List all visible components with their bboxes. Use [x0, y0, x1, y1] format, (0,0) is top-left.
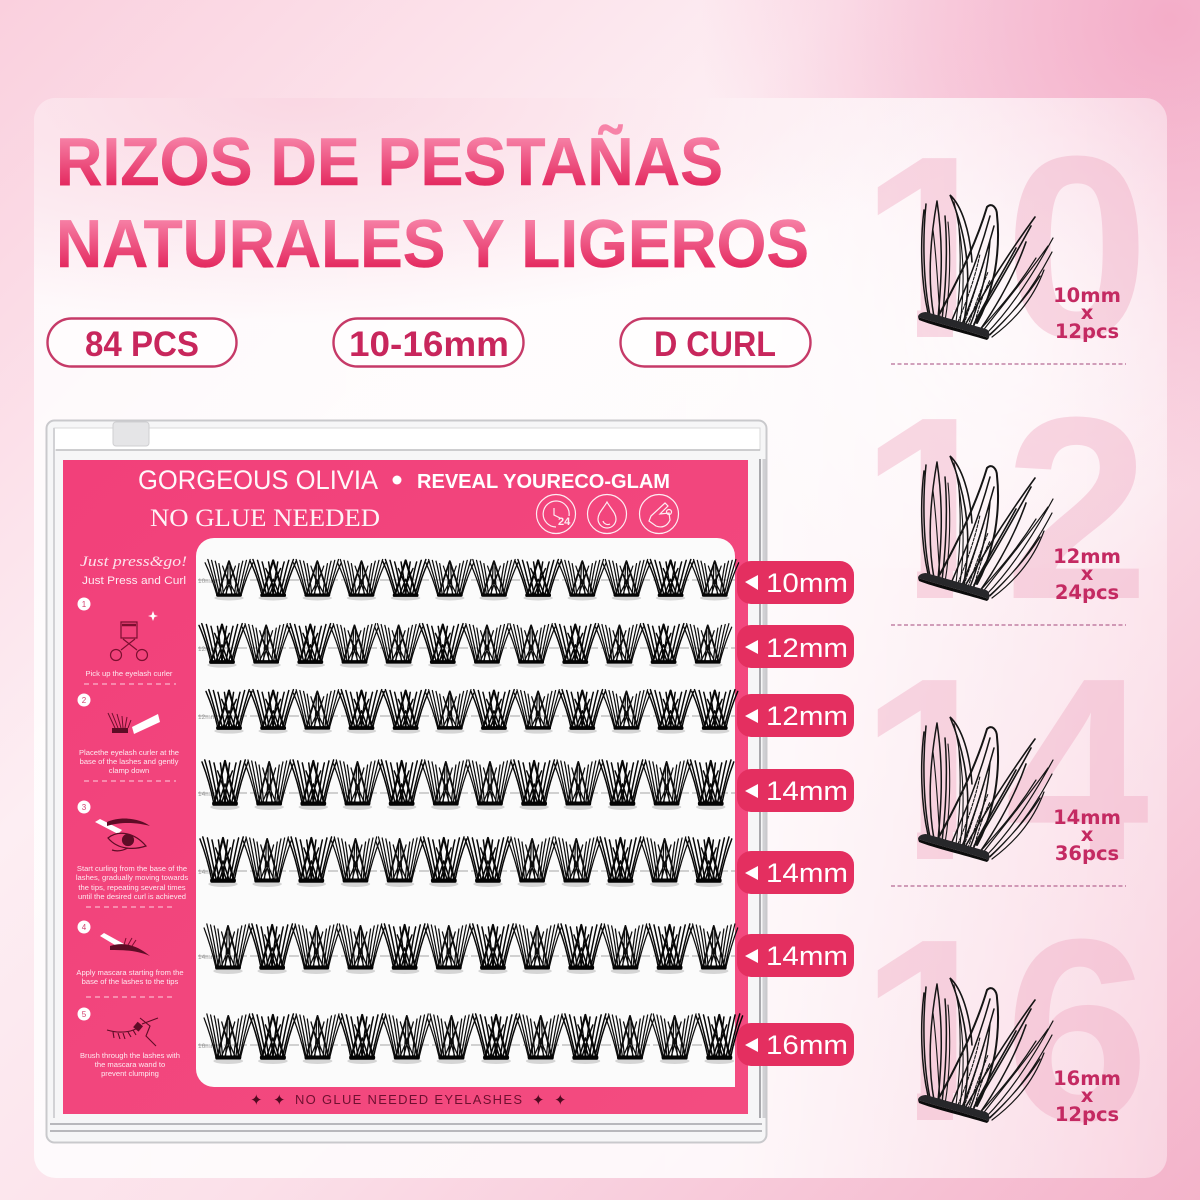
card header: brand: NO GLUE NEEDED — [150, 505, 380, 532]
step 5 — [78, 1008, 180, 1078]
pill: curl: D CURL — [654, 325, 776, 364]
row: 10mm lashes — [198, 559, 739, 600]
tag: 16mm — [737, 1023, 854, 1066]
title: RIZOS DE PESTAÑAS — [56, 124, 723, 200]
step 3: until the desired curl is achieved — [78, 892, 186, 901]
step 3: lashes, gradually moving towards — [76, 873, 188, 882]
card header: brand — [138, 465, 670, 532]
item: 12mm: 12 — [860, 364, 1149, 654]
item: 14mm: 36pcs — [1055, 842, 1119, 865]
tag: 14mm — [737, 934, 854, 977]
instructions column — [76, 554, 188, 1078]
row: 12mm lashes — [198, 624, 735, 668]
product: lash case — [46, 420, 766, 1142]
item: 10mm: x — [1081, 301, 1094, 324]
step 1: 1 — [82, 600, 87, 609]
item: 16mm: x — [1081, 1084, 1094, 1107]
item: 10mm: 10mm — [1053, 284, 1121, 307]
item: 12mm: 24pcs — [1055, 581, 1119, 604]
row: 10mm lashes: 10mm — [198, 578, 216, 585]
tag: 12mm: 12mm — [766, 701, 848, 731]
row: 16mm lashes — [198, 1014, 743, 1064]
item: 16mm — [878, 938, 1140, 1125]
card icons — [536, 494, 678, 534]
card footer text: ✦ — [250, 1092, 263, 1109]
row: 12mm lashes — [198, 690, 738, 734]
icon: 24 hours — [536, 494, 576, 534]
step 3 — [76, 800, 188, 901]
item: 10mm: 12pcs — [1055, 320, 1119, 343]
step 4: Apply mascara starting from the — [76, 968, 184, 977]
icon: pressing hand — [640, 494, 678, 534]
tag: 16mm: 16mm — [766, 1030, 848, 1060]
item: 12mm — [878, 416, 1139, 603]
step 5: prevent clumping — [101, 1069, 159, 1078]
step 5: Brush through the lashes with — [80, 1051, 180, 1060]
pill: count — [48, 318, 236, 366]
step 1 — [78, 598, 173, 678]
item: 12mm: 12mm — [1053, 545, 1121, 568]
tag: 10mm: 10mm — [766, 568, 848, 598]
step 2: base of the lashes and gently — [80, 757, 179, 766]
pill: curl — [620, 318, 810, 366]
step 4: base of the lashes to the tips — [82, 977, 179, 986]
item: 14mm: 14mm — [1053, 806, 1121, 829]
clear plastic case — [46, 420, 766, 1142]
card footer text — [250, 1092, 567, 1109]
pill: length: 10-16mm — [349, 325, 509, 364]
row: 14mm lashes: 14mm — [198, 791, 216, 798]
icon: 24 hours: 24 — [558, 516, 571, 528]
title: NATURALES Y LIGEROS — [56, 206, 809, 282]
card footer text: NO GLUE NEEDED EYELASHES — [295, 1092, 522, 1107]
row: 12mm lashes: 12mm — [198, 714, 216, 721]
step 3: Start curling from the base of the — [77, 864, 187, 873]
item: 16mm: 16 — [860, 886, 1149, 1176]
item: 12mm: x — [1081, 562, 1094, 585]
step 5: 5 — [82, 1010, 87, 1019]
row: 16mm lashes: 16mm — [198, 1043, 216, 1050]
heading: just press and go: Just Press and Curl — [82, 575, 186, 587]
tag: 12mm — [737, 625, 854, 668]
item: 10mm: 10 — [860, 103, 1149, 393]
step 3: 3 — [82, 803, 87, 812]
item: 14mm: 14 — [860, 625, 1151, 915]
tag: 14mm: 14mm — [766, 776, 848, 806]
heading: just press and go: Just press&go! — [80, 554, 187, 570]
pill: count: 84 PCS — [85, 325, 199, 364]
item: 16mm: 16mm — [1053, 1067, 1121, 1090]
row: 14mm lashes — [198, 760, 735, 810]
tag: 14mm: 14mm — [766, 858, 848, 888]
pill: length — [334, 318, 524, 366]
title — [56, 124, 809, 282]
tag: 12mm — [737, 694, 854, 737]
step 4: 4 — [82, 923, 87, 932]
card header: brand: GORGEOUS OLIVIA — [138, 465, 378, 495]
item: 14mm — [878, 680, 1148, 864]
step 5: the mascara wand to — [95, 1060, 165, 1069]
step 1: Pick up the eyelash curler — [86, 669, 173, 678]
length tags — [737, 561, 854, 1066]
spec pills — [48, 318, 810, 366]
card footer text: ✦ — [532, 1092, 545, 1109]
tag: 14mm — [737, 851, 854, 894]
item: 14mm: x — [1081, 823, 1094, 846]
step 2: 2 — [82, 696, 87, 705]
tag: 10mm — [737, 561, 854, 604]
step 2 — [78, 694, 179, 775]
step 3: the tips, repeating several times — [78, 883, 186, 892]
tag: 12mm: 12mm — [766, 633, 848, 663]
tag: 14mm: 14mm — [766, 941, 848, 971]
pink card — [63, 460, 748, 1114]
icon: water drop — [588, 494, 626, 534]
card footer text: ✦ — [273, 1092, 286, 1109]
length breakdown column — [878, 156, 1148, 1125]
lash rows — [198, 559, 743, 1064]
white lash tray — [196, 538, 735, 1087]
step 2: clamp down — [109, 766, 149, 775]
row: 14mm lashes — [198, 924, 738, 974]
row: 14mm lashes: 14mm — [198, 954, 216, 961]
item: 10mm — [878, 156, 1138, 342]
card header: brand: REVEAL YOURECO-GLAM — [417, 471, 670, 493]
row: 14mm lashes: 14mm — [198, 869, 216, 876]
tag: 14mm — [737, 769, 854, 812]
step 2: Placethe eyelash curler at the — [79, 748, 179, 757]
item: 16mm: 12pcs — [1055, 1103, 1119, 1126]
row: 14mm lashes — [198, 837, 735, 887]
heading: just press and go — [80, 554, 187, 587]
row: 12mm lashes: 12mm — [198, 646, 216, 653]
card footer text: ✦ — [554, 1092, 567, 1109]
step 4 — [76, 920, 184, 986]
